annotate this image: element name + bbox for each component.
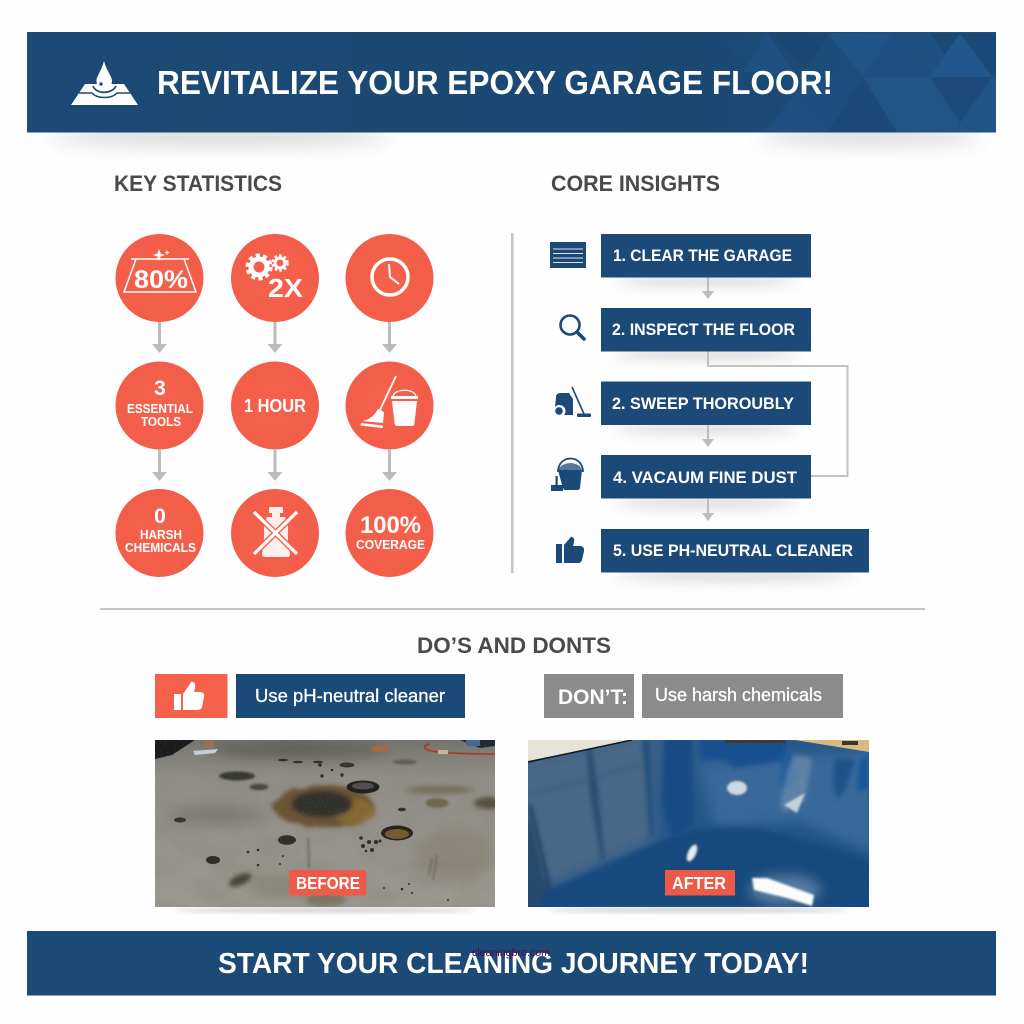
don't: label tile — [544, 674, 634, 718]
stat: 80%: 80% — [134, 266, 188, 294]
broad grime and streaks — [165, 742, 493, 897]
stat: 3 essential tools: TOOLS — [141, 414, 181, 429]
panel: key statistics grid — [116, 234, 434, 577]
stat: 1 hour: 1 HOUR — [244, 395, 306, 416]
icon: bucket and mop — [551, 458, 583, 491]
step 5 — [601, 529, 869, 572]
icon: thumbs up — [556, 537, 584, 563]
stat: 80% — [116, 234, 204, 322]
stat: 100% coverage: COVERAGE — [356, 537, 425, 552]
photo shadows — [175, 908, 848, 912]
photo: before, stained concrete — [155, 740, 502, 907]
stat: 0 harsh chemicals: CHEMICALS — [125, 540, 196, 555]
photo: after, glossy blue epoxy — [528, 740, 869, 907]
small oil specks — [247, 759, 449, 901]
stat: 3 essential tools: 3 — [154, 377, 166, 400]
stat: 2X with gears — [231, 234, 319, 322]
icon: magnifying glass — [560, 316, 584, 339]
do: text bar: Use pH-neutral cleaner — [255, 685, 445, 706]
stat: 100% coverage — [346, 489, 434, 577]
heading: core insights: CORE INSIGHTS — [551, 171, 720, 196]
stat: 3 essential tools — [116, 362, 204, 450]
footer banner — [27, 931, 996, 996]
mirrored reflections — [528, 738, 869, 892]
title: REVITALIZE YOUR EPOXY GARAGE FLOOR! — [157, 64, 833, 101]
step 2 sweep: 2. SWEEP THOROUBLY — [612, 394, 795, 413]
floor sheen and shade — [520, 735, 875, 885]
vertical separator — [511, 233, 514, 573]
step 2 inspect — [601, 308, 811, 352]
stat: 100% coverage: 100% — [360, 512, 421, 539]
flow connectors — [702, 277, 848, 521]
stat: 0 harsh chemicals — [116, 489, 204, 577]
step 2 inspect: 2. INSPECT THE FLOOR — [612, 320, 795, 339]
step 2 sweep — [601, 382, 811, 425]
stat: clock — [346, 234, 434, 322]
don't: text bar: Use harsh chemicals — [655, 685, 822, 705]
icon: garage door — [550, 242, 586, 268]
do: text bar — [236, 674, 465, 718]
step 4 — [601, 455, 811, 498]
before label: BEFORE — [296, 873, 360, 893]
heading: key statistics: KEY STATISTICS — [114, 171, 282, 196]
divider — [100, 608, 925, 610]
step 1 — [601, 234, 811, 278]
before label — [289, 870, 366, 896]
step 1: 1. CLEAR THE GARAGE — [613, 246, 792, 265]
do: thumbs up tile — [155, 674, 228, 718]
stat: 3 essential tools: ESSENTIAL — [127, 401, 193, 416]
stains — [174, 760, 502, 907]
background clutter — [155, 740, 495, 759]
stat: 2X with gears: 2X — [268, 273, 304, 303]
stat: crossed-out bottle — [231, 489, 319, 577]
wall and back clutter — [528, 740, 869, 762]
don't: text bar — [642, 674, 843, 718]
step 4: 4. VACAUM FINE DUST — [613, 468, 798, 487]
footer banner: START YOUR CLEANING JOURNEY TODAY! — [218, 948, 809, 980]
header triangle pattern — [720, 33, 996, 132]
header banner — [27, 32, 996, 143]
after label — [665, 870, 735, 896]
stat: broom and bucket — [346, 362, 434, 450]
stat: 1 hour — [231, 362, 319, 450]
icon: floor drop logo — [71, 61, 138, 105]
step 5: 5. USE PH-NEUTRAL CLEANER — [613, 541, 853, 560]
gloss highlights — [685, 781, 821, 906]
icon: vacuum and mop — [555, 387, 591, 417]
don't: label tile: DON’T: — [558, 686, 628, 709]
stat: 0 harsh chemicals: 0 — [154, 505, 166, 528]
arrows between stats — [152, 322, 397, 481]
panel: core insights steps — [550, 234, 869, 580]
heading: do's and donts: DO’S AND DONTS — [417, 633, 611, 658]
stat: 0 harsh chemicals: HARSH — [140, 527, 182, 542]
step box shadows — [614, 277, 855, 580]
after label: AFTER — [672, 873, 726, 893]
watermark: cleaningbro.com — [472, 947, 550, 959]
